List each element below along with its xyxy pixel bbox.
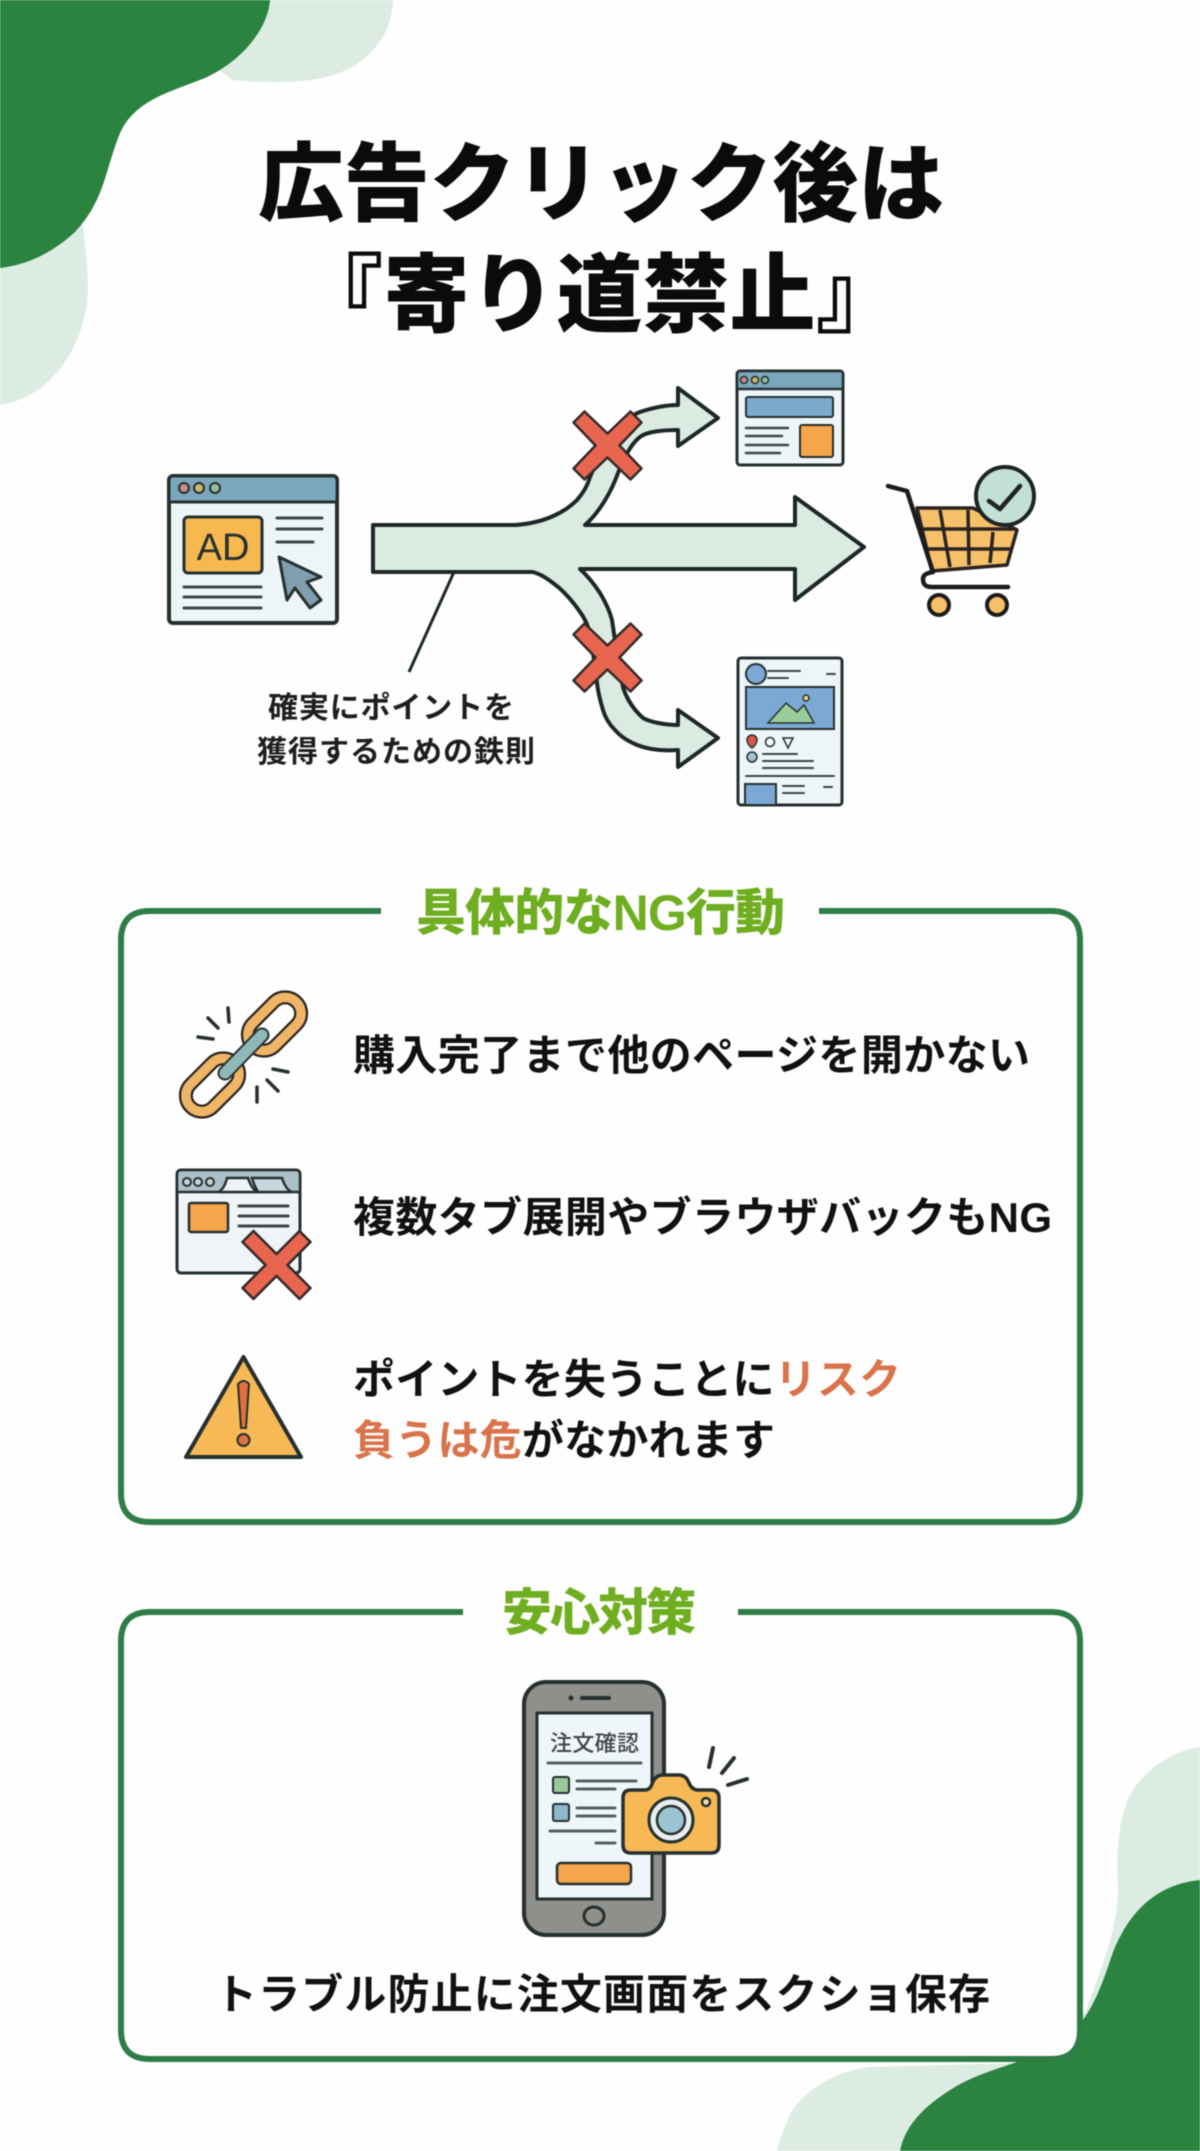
caption: 確実にポイントを bbox=[268, 692, 514, 725]
diagram: diverging paths bbox=[169, 371, 1034, 805]
caption bbox=[257, 692, 535, 769]
icon: social feed card bbox=[738, 658, 842, 805]
text: row 3: ポイントを失うことにリスク bbox=[353, 1356, 901, 1403]
title bbox=[258, 137, 944, 344]
icon: browser tabs with X bbox=[177, 1170, 310, 1299]
heading: 安心対策 bbox=[502, 1585, 696, 1641]
panel: 安心対策 bbox=[121, 1585, 1080, 2059]
decorative blobs: top left bbox=[0, 0, 393, 405]
title: 『寄り道禁止』 bbox=[297, 248, 902, 344]
icon: phone with order confirmation: 注文確認 bbox=[550, 1731, 639, 1756]
icon: ad browser window bbox=[169, 476, 337, 623]
callout line bbox=[409, 572, 454, 672]
text: row 3: 負うは危がなかれます bbox=[353, 1417, 775, 1464]
icon: web page window bbox=[737, 371, 843, 465]
caption: 獲得するための鉄則 bbox=[257, 736, 535, 769]
icon: shopping cart with check bbox=[888, 467, 1034, 615]
icon: phone with order confirmation bbox=[524, 1682, 664, 1935]
text: screenshot tip: トラブル防止に注文画面をスクショ保存 bbox=[215, 1971, 990, 2018]
decorative blobs: bottom right bbox=[777, 1747, 1200, 2151]
panel: 具体的なNG行動 bbox=[121, 885, 1080, 1522]
icon: red X upper bbox=[574, 412, 642, 480]
icon: red X lower bbox=[574, 624, 642, 692]
arrow: main path with branches bbox=[373, 388, 864, 767]
text: row 1: 購入完了まで他のページを開かない bbox=[353, 1032, 1030, 1079]
icon: camera bbox=[623, 1748, 747, 1853]
heading: 具体的なNG行動 bbox=[416, 885, 785, 941]
icon: broken chain bbox=[179, 991, 308, 1118]
text: row 3 bbox=[353, 1356, 901, 1464]
icon: warning triangle bbox=[186, 1357, 301, 1457]
icon: ad browser window: AD bbox=[197, 527, 249, 569]
text: row 2: 複数タブ展開やブラウザバックもNG bbox=[353, 1194, 1052, 1241]
title: 広告クリック後は bbox=[258, 137, 944, 233]
